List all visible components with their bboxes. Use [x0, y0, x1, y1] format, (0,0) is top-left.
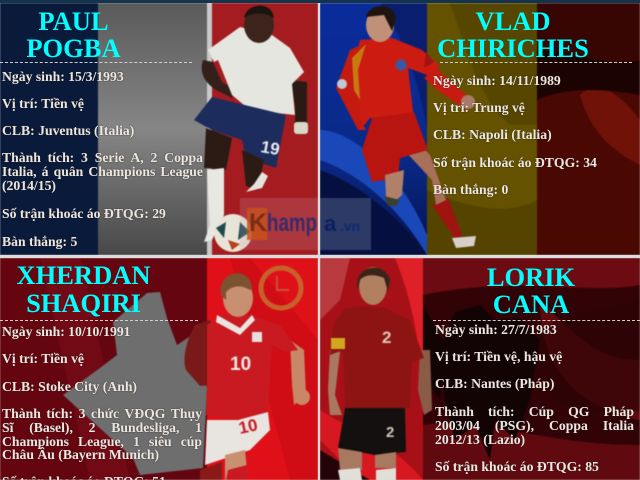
info divider	[0, 62, 192, 63]
panel: Paul Pogba	[0, 3, 318, 255]
watermark: Khampha: K	[249, 209, 267, 237]
title: Vlad Chiriches: VLAD	[475, 6, 551, 36]
panel: Lorik Cana	[320, 258, 640, 480]
text: Pogba facts: Bàn thắng: 5	[2, 234, 77, 249]
title: Paul Pogba: POGBA	[26, 32, 121, 62]
watermark: Khampha tail	[320, 198, 371, 250]
text: Cana facts: 2012/13 (Lazio)	[435, 432, 525, 447]
Swiss flag background	[0, 258, 318, 480]
shirt numbers and crest: 10	[230, 354, 251, 375]
text: Cana facts: Số trận khoác áo ĐTQG: 85	[435, 459, 599, 474]
title: Paul Pogba: PAUL	[38, 6, 109, 36]
shirt numbers and crest	[230, 332, 262, 438]
text: Chiriches facts: Bàn thắng: 0	[433, 182, 508, 197]
panel: Xherdan Shaqiri	[0, 258, 318, 480]
text: Shaqiri facts: Ngày sinh: 10/10/1991	[2, 324, 131, 339]
top strip	[0, 0, 640, 3]
artwork: French flag and Pogba	[0, 3, 318, 255]
text: Cana facts: Vị trí: Tiền vệ, hậu vệ	[435, 349, 562, 364]
text: Pogba facts: CLB: Juventus (Italia)	[2, 123, 134, 138]
text: Cana facts: Ngày sinh: 27/7/1983	[435, 322, 557, 337]
French flag background	[0, 3, 318, 255]
shirt numbers: 2	[382, 328, 391, 347]
text: Cana facts: Thành tích: Cúp QG Pháp	[435, 404, 634, 419]
panel: Vlad Chiriches	[320, 3, 640, 255]
title: Vlad Chiriches: CHIRICHES	[437, 32, 589, 62]
text: Pogba facts: Thành tích: 3 Serie A, 2 Coppa	[2, 150, 203, 165]
shirt numbers and crest: 10	[237, 415, 259, 438]
text: Pogba facts: (2014/15)	[2, 178, 56, 193]
text: Chiriches facts: Vị trí: Trung vệ	[433, 100, 525, 115]
watermark: Khampha tail: a	[324, 211, 337, 236]
artwork: Romanian flag and Chiriches	[320, 3, 640, 255]
watermark: Khampha tail: .vn	[340, 218, 360, 234]
shirt numbers	[382, 328, 394, 441]
Albanian flag background	[320, 258, 640, 480]
text: Shaqiri facts: Thành tích: 3 chức VĐQG Thụy	[2, 406, 202, 421]
text: Pogba facts: Vị trí: Tiền vệ	[2, 96, 84, 111]
title: Xherdan Shaqiri: SHAQIRI	[26, 288, 141, 318]
player: Shaqiri	[184, 273, 310, 480]
info divider	[440, 62, 632, 63]
text: Chiriches facts	[432, 73, 597, 198]
Romanian flag background	[320, 3, 640, 255]
player: Chiriches	[336, 6, 476, 248]
text: Pogba facts: Ngày sinh: 15/3/1993	[2, 69, 124, 84]
artwork: Albanian flag and Cana	[320, 258, 640, 480]
title: Xherdan Shaqiri	[16, 260, 150, 318]
Albanian eagle emblem	[423, 305, 540, 460]
text: Shaqiri facts: CLB: Stoke City (Anh)	[2, 379, 137, 394]
text: Chiriches facts: CLB: Napoli (Italia)	[433, 127, 552, 142]
text: Shaqiri facts: Châu Âu (Bayern Munich)	[2, 447, 159, 462]
watermark: Khampha	[240, 198, 318, 250]
text: Chiriches facts: Số trận khoác áo ĐTQG: 34	[433, 155, 597, 170]
text: Shaqiri facts: Sĩ (Basel), 2 Bundesliga, 1	[2, 420, 202, 435]
text: Cana facts: 2003/04 (PSG), Coppa Italia	[435, 418, 634, 433]
text: Shaqiri facts: Champions League, 1 siêu cúp	[2, 434, 202, 449]
text: Pogba facts	[2, 69, 204, 249]
title: Vlad Chiriches	[437, 6, 589, 62]
shirt and shorts number: 19	[259, 137, 281, 159]
title: Lorik Cana: LORIK	[487, 262, 575, 292]
text: Shaqiri facts: Vị trí: Tiền vệ	[2, 351, 84, 366]
info divider	[433, 320, 640, 321]
artwork: Swiss flag and Shaqiri	[0, 258, 318, 480]
info divider	[0, 320, 198, 321]
text: Pogba facts: Italia, á quân Champions League	[2, 164, 203, 179]
watermark: 24h clock	[261, 268, 301, 308]
player: Pogba	[194, 6, 308, 252]
shirt numbers: 2	[386, 424, 394, 441]
text: Shaqiri facts	[2, 324, 202, 480]
text: Pogba facts: Số trận khoác áo ĐTQG: 29	[2, 206, 166, 221]
title: Xherdan Shaqiri: XHERDAN	[16, 260, 150, 290]
title: Lorik Cana: CANA	[493, 288, 569, 318]
player: Cana	[328, 267, 432, 480]
text: Chiriches facts: Ngày sinh: 14/11/1989	[433, 73, 561, 88]
title: Lorik Cana	[487, 262, 575, 318]
title: Paul Pogba	[26, 6, 121, 62]
text: Cana facts: CLB: Nantes (Pháp)	[435, 376, 554, 391]
text: Cana facts	[435, 322, 634, 474]
